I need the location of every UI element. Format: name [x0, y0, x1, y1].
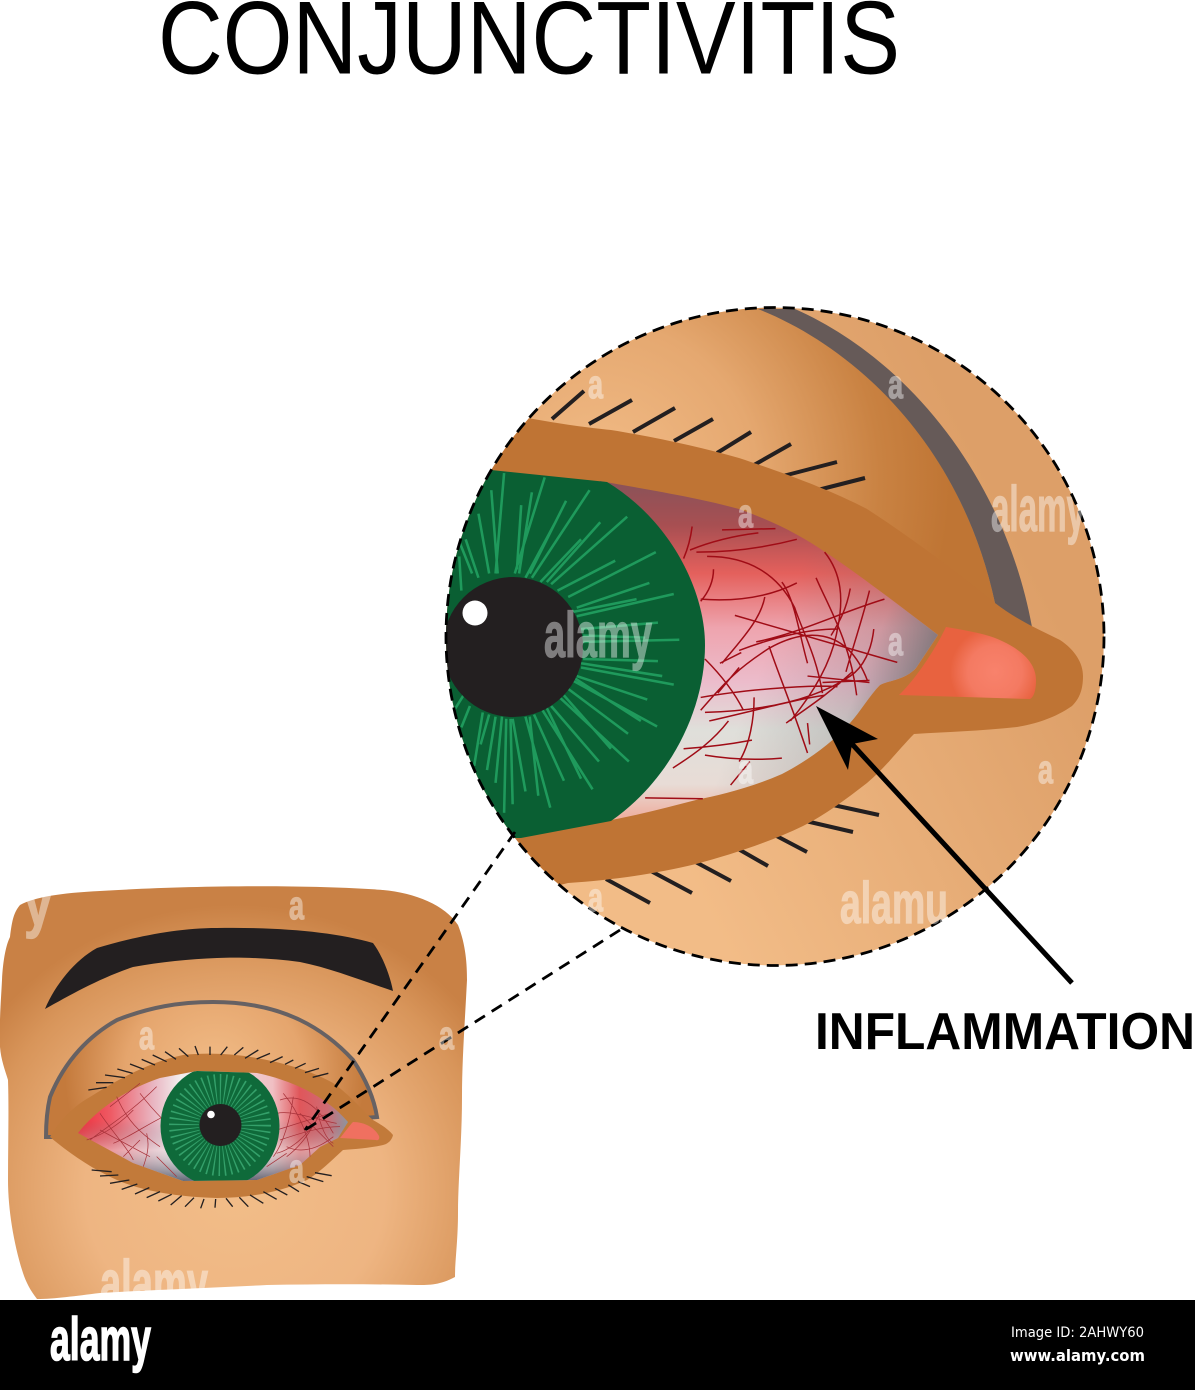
small blood vessels [87, 1083, 340, 1177]
watermarks: a [439, 1014, 455, 1058]
pupil highlight [462, 600, 488, 626]
grey eyelid crease band [758, 309, 1032, 640]
small caruncle [340, 1122, 379, 1140]
skin background of circle [446, 308, 1104, 966]
watermarks [24, 363, 1085, 1319]
watermarks: a [738, 748, 754, 792]
eyebrow [45, 928, 393, 1009]
footer logo: alamy [50, 1306, 151, 1373]
footer bar [0, 1300, 1195, 1390]
watermarks: a [1038, 748, 1054, 792]
watermarks: alamy [544, 599, 652, 671]
caruncle [899, 627, 1036, 699]
watermarks: a [888, 620, 904, 664]
pupil [443, 577, 583, 717]
small iris [160, 1065, 280, 1187]
sclera [78, 1071, 348, 1181]
watermarks: alamy [100, 1247, 208, 1319]
watermarks: a [888, 363, 904, 407]
watermarks: a [738, 492, 754, 536]
watermarks: a [588, 876, 604, 920]
small lower eyelashes [92, 1170, 332, 1208]
blood vessels [645, 526, 897, 799]
lower eyelashes [606, 803, 879, 903]
footer url: www.alamy.com [1010, 1346, 1145, 1365]
panel: magnified eye circle [440, 300, 1104, 966]
iris [440, 470, 705, 838]
eyelid band [440, 418, 1083, 900]
small pupil highlight [207, 1111, 215, 1118]
zoom dashed lines [305, 832, 620, 1130]
watermarks: a [588, 363, 604, 407]
small pupil [200, 1104, 242, 1146]
eyelid crease fold [46, 1002, 377, 1137]
watermarks: y [24, 867, 52, 939]
eyelid band [50, 1054, 393, 1198]
arrow: inflammation pointer [816, 706, 1072, 983]
watermarks: alamu [840, 871, 948, 936]
small upper eyelashes [88, 1046, 328, 1090]
skin patch [0, 886, 467, 1299]
footer image id: Image ID: 2AHWY60 [1011, 1325, 1144, 1341]
watermarks: alamy [991, 473, 1085, 545]
upper eyelashes [552, 391, 865, 492]
watermarks: a [289, 1147, 305, 1191]
panel: whole eye skin square [0, 886, 467, 1299]
sclera [600, 481, 938, 822]
upper eyelid fold [513, 308, 995, 603]
dashed circle outline [446, 308, 1104, 966]
watermarks: a [289, 884, 305, 928]
iris fibres [453, 473, 679, 813]
watermarks: a [139, 1014, 155, 1058]
